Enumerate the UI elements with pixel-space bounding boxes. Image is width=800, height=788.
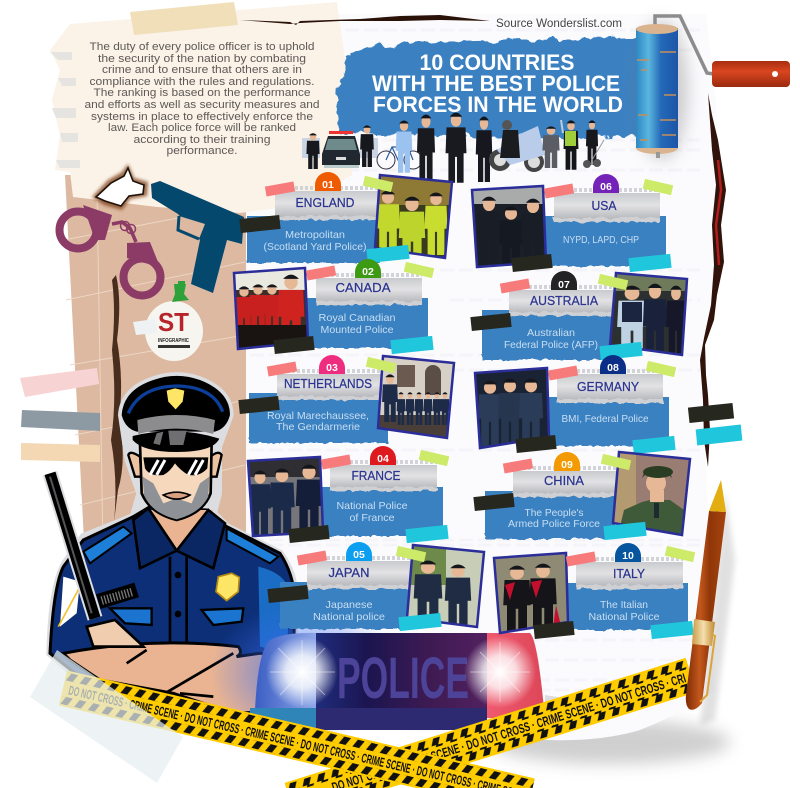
card 09 China: Armed Police Force <box>508 518 600 530</box>
logo badge with pin: ST <box>158 307 189 337</box>
card 05 Japan: National police <box>313 611 385 623</box>
photo France <box>248 457 323 536</box>
card 08 Germany: GERMANY <box>577 379 639 394</box>
icon: pen <box>686 480 735 725</box>
crime scene tape: falling band <box>59 670 535 788</box>
card 04 France: FRANCE <box>352 468 401 483</box>
card 07 Australia: Federal Police (AFP) <box>504 339 598 351</box>
card 04 France: of France <box>350 512 395 524</box>
main white paper <box>240 14 722 740</box>
baton <box>50 473 137 618</box>
rank badge 08: 08 <box>607 362 619 374</box>
right burnt edge <box>700 93 726 467</box>
photo Australia <box>610 273 687 358</box>
card 07 Australia: AUSTRALIA <box>530 293 598 308</box>
logo badge with pin: INFOGRAPHIC <box>158 338 189 344</box>
logo badge with pin <box>133 281 203 361</box>
rank badge 04 <box>370 446 396 465</box>
police siren light <box>210 602 575 742</box>
card 05 Japan: JAPAN <box>328 565 370 580</box>
photo England <box>375 175 455 268</box>
description text <box>84 41 320 157</box>
crossed arms <box>63 620 300 713</box>
rank badge 06: 06 <box>600 181 612 193</box>
description text: law. Each police force will be ranked <box>108 122 296 134</box>
rank badge 10: 10 <box>622 550 634 562</box>
card 07 Australia <box>470 271 687 360</box>
description text: according to their training <box>134 134 270 146</box>
rank badge 08 <box>600 355 626 374</box>
source credit: Source Wonderslist.com <box>496 18 622 30</box>
card 02 Canada: Royal Canadian <box>318 312 396 324</box>
transparent adhesive tape <box>30 650 183 783</box>
description text: systems in place to effectively enforce the <box>91 111 313 123</box>
card 01 England: Metropolitan <box>285 229 345 241</box>
icon: handgun <box>151 181 244 293</box>
card 08 Germany <box>475 355 676 454</box>
card 06 USA: NYPD, LAPD, CHP <box>563 234 639 246</box>
card 10 Italy <box>494 543 695 639</box>
rank badge 05 <box>346 542 372 561</box>
rank badge 02: 02 <box>362 266 374 278</box>
photo Italy <box>494 553 568 634</box>
rank badge 07: 07 <box>558 279 570 291</box>
rank badge 07 <box>551 271 577 291</box>
card 01 England <box>239 172 455 268</box>
description text: and efforts as well as security measures and <box>84 99 320 111</box>
card 01 England: (Scotland Yard Police) <box>264 241 366 253</box>
rank badge 05: 05 <box>353 549 365 561</box>
description text: crime and to ensure that others are in <box>102 64 302 76</box>
card 09 China: CHINA <box>544 473 584 488</box>
description text: performance. <box>166 145 238 157</box>
rank badge 04: 04 <box>377 453 389 465</box>
card 04 France: National Police <box>336 500 408 512</box>
card 02 Canada <box>234 259 434 354</box>
blue painted title band <box>335 38 642 137</box>
card 05 Japan: Japanese <box>326 599 373 611</box>
card 03 Netherlands: Royal Marechaussee, <box>267 410 369 422</box>
cardboard sheet <box>64 175 246 560</box>
masking tape on note <box>130 2 238 35</box>
card 02 Canada: CANADA <box>336 280 391 295</box>
card 09 China <box>473 452 690 540</box>
description text: the security of the nation by combating <box>98 53 306 65</box>
rank badge 01: 01 <box>322 179 334 191</box>
siren POLICE lettering: POLICE <box>337 646 469 711</box>
cardboard tear burn <box>111 275 123 522</box>
crime scene tape: rising band <box>285 658 696 788</box>
card 02 Canada: Mounted Police <box>320 324 394 336</box>
burnt hole in note <box>92 164 148 210</box>
rank badge 06 <box>593 174 619 193</box>
officer outline halo <box>50 376 295 697</box>
card 06 USA: USA <box>592 198 617 213</box>
title: FORCES IN THE WORLD <box>373 92 623 117</box>
description text: compliance with the rules and regulations. <box>90 76 314 88</box>
card 01 England: ENGLAND <box>296 195 354 210</box>
police officers group illustration <box>302 113 604 183</box>
card 03 Netherlands: The Gendarmerie <box>276 421 360 433</box>
card 04 France <box>248 446 449 543</box>
card 03 Netherlands <box>238 355 458 443</box>
rank badge 09: 09 <box>561 459 573 471</box>
rank badge 09 <box>554 452 580 471</box>
description text: The duty of every police officer is to uphold <box>90 41 314 53</box>
title: 10 COUNTRIES <box>420 50 574 75</box>
rank badge 10 <box>615 543 641 562</box>
icon: paint roller <box>636 16 790 160</box>
photo China <box>612 452 690 540</box>
police cap <box>122 376 230 452</box>
title <box>372 50 623 117</box>
card 05 Japan <box>267 542 484 631</box>
description text: The ranking is based on the performance <box>94 87 310 99</box>
card 10 Italy: National Police <box>588 611 660 623</box>
card 03 Netherlands: NETHERLANDS <box>284 376 372 391</box>
card 10 Italy: ITALY <box>613 566 645 581</box>
card 07 Australia: Australian <box>527 327 575 339</box>
police officer mascot <box>50 376 300 713</box>
icon: handcuffs <box>60 205 160 296</box>
title: WITH THE BEST POLICE <box>372 71 620 96</box>
paper bottom shadow <box>490 720 730 764</box>
photo USA <box>472 186 547 272</box>
rank badge 01 <box>315 172 341 191</box>
card 08 Germany: BMI, Federal Police <box>562 413 649 425</box>
photo Netherlands <box>378 356 458 440</box>
card 06 USA <box>472 174 673 272</box>
siren flares <box>266 636 536 708</box>
photo Canada <box>234 268 309 349</box>
rank badge 03: 03 <box>326 362 338 374</box>
photo Japan <box>407 545 484 627</box>
rank badge 02 <box>355 259 381 278</box>
card 09 China: The People's <box>524 507 584 519</box>
note paper <box>50 2 352 213</box>
card 10 Italy: The Italian <box>600 599 648 611</box>
head and face <box>128 443 222 520</box>
photo Germany <box>475 368 549 448</box>
rank badge 03 <box>319 355 345 374</box>
loose tape pieces right <box>688 403 742 446</box>
paper texture <box>250 30 700 700</box>
top burnt edge <box>240 15 490 25</box>
decorative left tape strips <box>20 368 100 462</box>
torso and uniform <box>50 507 295 693</box>
